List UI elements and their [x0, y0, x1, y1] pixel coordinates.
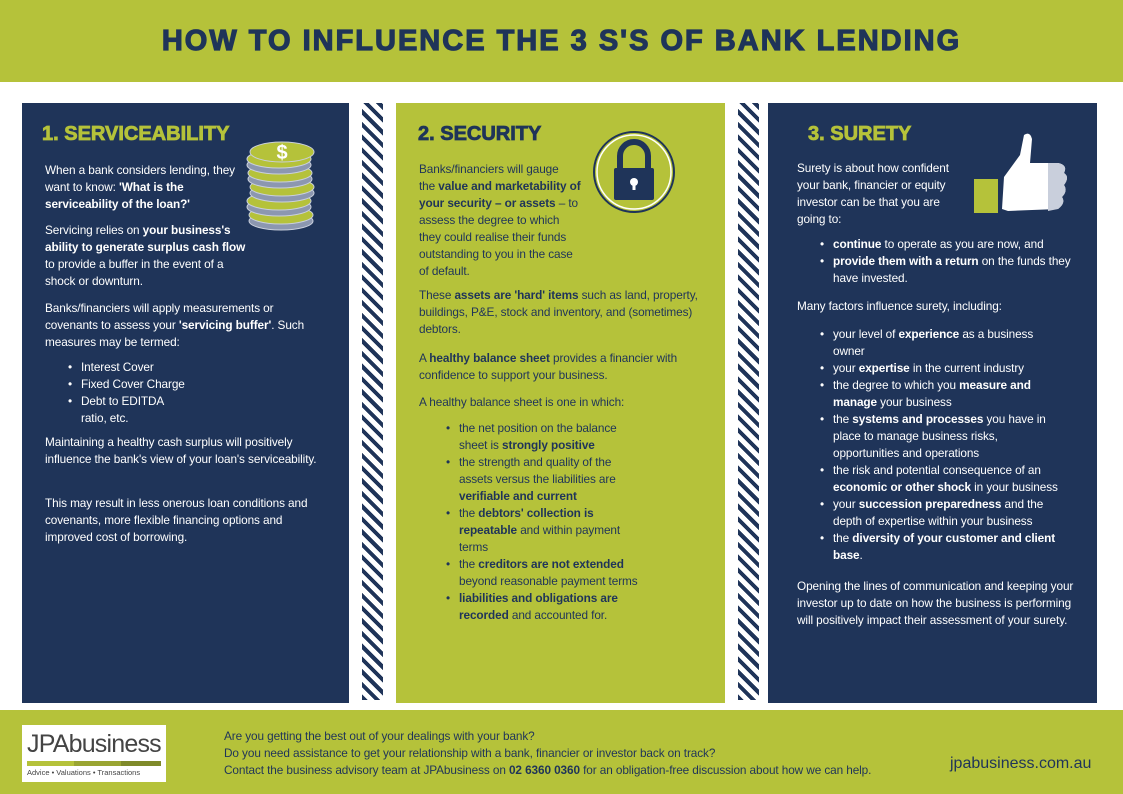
list: factors: the degree to which you measure and	[833, 378, 1031, 392]
text: hard items: debtors.	[419, 322, 461, 336]
text: intro	[45, 163, 235, 211]
list: factors: the systems and processes you have in	[833, 412, 1046, 426]
list: balance sheet criteria	[446, 421, 638, 622]
list: continue: provide them with a return on the funds they	[833, 254, 1071, 268]
list: balance sheet criteria: beyond reasonable payment terms	[459, 574, 638, 588]
text: one in which: A healthy balance sheet is one in which:	[419, 395, 624, 409]
text: result	[45, 496, 307, 544]
text: result: improved cost of borrowing.	[45, 530, 187, 544]
list: measures: ratio, etc.	[81, 411, 128, 425]
text: servicing relies	[45, 223, 246, 288]
text: balance sheet: A healthy balance sheet provides a financier with	[419, 351, 677, 365]
panel: serviceability	[22, 103, 349, 703]
list: factors: the risk and potential consequence of an	[833, 463, 1041, 477]
text: hard items: buildings, P&E, stock and inventory, and (sometimes)	[419, 305, 692, 319]
icon: padlock	[593, 131, 675, 213]
list: continue	[820, 237, 1071, 285]
text: balance sheet	[419, 351, 677, 382]
list: factors: opportunities and operations	[833, 446, 979, 460]
list: measures: Interest Cover	[81, 360, 154, 374]
text: gauge: outstanding to you in the case	[419, 247, 573, 261]
text: servicing relies: Servicing relies on your business's	[45, 223, 231, 237]
text: intro: want to know: 'What is the	[45, 180, 184, 194]
text: gauge: of default.	[419, 264, 470, 278]
list: balance sheet criteria: repeatable and within payment	[459, 523, 620, 537]
list: balance sheet criteria: the net position on the balance	[459, 421, 617, 435]
text: communication	[797, 579, 1074, 627]
list: measures: Fixed Cover Charge	[81, 377, 185, 391]
title: HOW TO INFLUENCE THE 3 S'S OF BANK LENDING	[162, 25, 961, 57]
list: balance sheet criteria: the debtors' collection is	[459, 506, 594, 520]
logo: JPAbusiness	[27, 730, 161, 758]
text: result: This may result in less onerous loan conditions and	[45, 496, 307, 510]
icon: thumbs up	[974, 134, 1067, 213]
text: healthy surplus: influence the bank's view of your loan's serviceability.	[45, 452, 316, 466]
text: gauge: the value and marketability of	[419, 179, 581, 193]
text: gauge: Banks/financiers will gauge	[419, 162, 559, 176]
text: communication: investor up to date on how the business is performing	[797, 596, 1071, 610]
text: gauge	[419, 162, 581, 278]
text: covenants	[45, 301, 304, 349]
footer text: Contact the business advisory team at JPAbusiness on 02 6360 0360 for an obligation-free discussion about how we can help.	[224, 763, 871, 777]
text: communication: will positively impact their assessment of your surety.	[797, 613, 1067, 627]
list: balance sheet criteria: terms	[459, 540, 488, 554]
list: factors: your level of experience as a business	[833, 327, 1033, 341]
heading: security: 2. SECURITY	[418, 123, 541, 145]
list: factors: your expertise in the current industry	[833, 361, 1024, 375]
text: intro: investor can be that you are	[797, 195, 940, 209]
divider stripe 1	[362, 103, 383, 700]
logo: Advice • Valuations • Transactions	[27, 768, 140, 777]
text: servicing relies: to provide a buffer in the event of a	[45, 257, 223, 271]
list: factors	[820, 327, 1058, 562]
panel: security	[396, 103, 725, 703]
list: measures: Debt to EDITDA	[81, 394, 164, 408]
text: covenants: Banks/financiers will apply measurements or	[45, 301, 273, 315]
list: balance sheet criteria: the creditors are not extended	[459, 557, 624, 571]
list: balance sheet criteria: assets versus the liabilities are	[459, 472, 616, 486]
text: gauge: your security – or assets – to	[419, 196, 578, 210]
list: factors: depth of expertise within your business	[833, 514, 1032, 528]
heading: surety: 3. SURETY	[808, 123, 911, 145]
list: balance sheet criteria: verifiable and current	[459, 489, 577, 503]
icon: coins	[246, 142, 314, 230]
text: many factors: Many factors influence surety, including:	[797, 299, 1002, 313]
text: intro: going to:	[797, 212, 841, 226]
text: healthy surplus: Maintaining a healthy cash surplus will positively	[45, 435, 292, 449]
text: covenants: covenants to assess your 'servicing buffer'. Such	[45, 318, 304, 332]
list: continue: have invested.	[833, 271, 908, 285]
heading: serviceability: 1. SERVICEABILITY	[42, 123, 229, 145]
list: continue: continue to operate as you are now, and	[833, 237, 1044, 251]
text: intro: serviceability of the loan?'	[45, 197, 190, 211]
list: measures	[68, 360, 185, 425]
list: factors: economic or other shock in your business	[833, 480, 1058, 494]
list: balance sheet criteria: recorded and accounted for.	[459, 608, 607, 622]
website: jpabusiness.com.au	[950, 755, 1091, 772]
list: balance sheet criteria: the strength and quality of the	[459, 455, 611, 469]
text: healthy surplus	[45, 435, 316, 466]
text: result: covenants, more flexible financing options and	[45, 513, 282, 527]
header band	[0, 0, 1123, 82]
list: factors: the diversity of your customer and client	[833, 531, 1055, 545]
text: intro	[797, 161, 949, 226]
list: factors: owner	[833, 344, 865, 358]
text: communication: Opening the lines of communication and keeping your	[797, 579, 1073, 593]
text: intro: When a bank considers lending, they	[45, 163, 235, 177]
text: servicing relies: ability to generate surplus cash flow	[45, 240, 245, 254]
logo	[22, 725, 166, 782]
list: factors: place to manage business risks,	[833, 429, 998, 443]
list: factors: your succession preparedness and the	[833, 497, 1043, 511]
text: hard items	[419, 288, 698, 336]
list: factors: base.	[833, 548, 863, 562]
text: balance sheet: confidence to support your business.	[419, 368, 608, 382]
divider stripe 2	[738, 103, 759, 700]
list: balance sheet criteria: liabilities and obligations are	[459, 591, 618, 605]
panel: surety	[768, 103, 1097, 703]
text: gauge: they could realise their funds	[419, 230, 566, 244]
text: gauge: assess the degree to which	[419, 213, 559, 227]
footer text	[224, 729, 871, 777]
text: covenants: measures may be termed:	[45, 335, 180, 349]
text: hard items: These assets are 'hard' items such as land, property,	[419, 288, 698, 302]
text: servicing relies: shock or downturn.	[45, 274, 143, 288]
footer band	[0, 710, 1123, 794]
list: factors: manage your business	[833, 395, 952, 409]
footer text: Are you getting the best out of your dealings with your bank?	[224, 729, 535, 743]
footer text: Do you need assistance to get your relationship with a bank, financier or investor back on track?	[224, 746, 715, 760]
text: intro: your bank, financier or equity	[797, 178, 945, 192]
icon: coins: $	[276, 142, 288, 164]
text: intro: Surety is about how confident	[797, 161, 949, 175]
list: balance sheet criteria: sheet is strongly positive	[459, 438, 595, 452]
